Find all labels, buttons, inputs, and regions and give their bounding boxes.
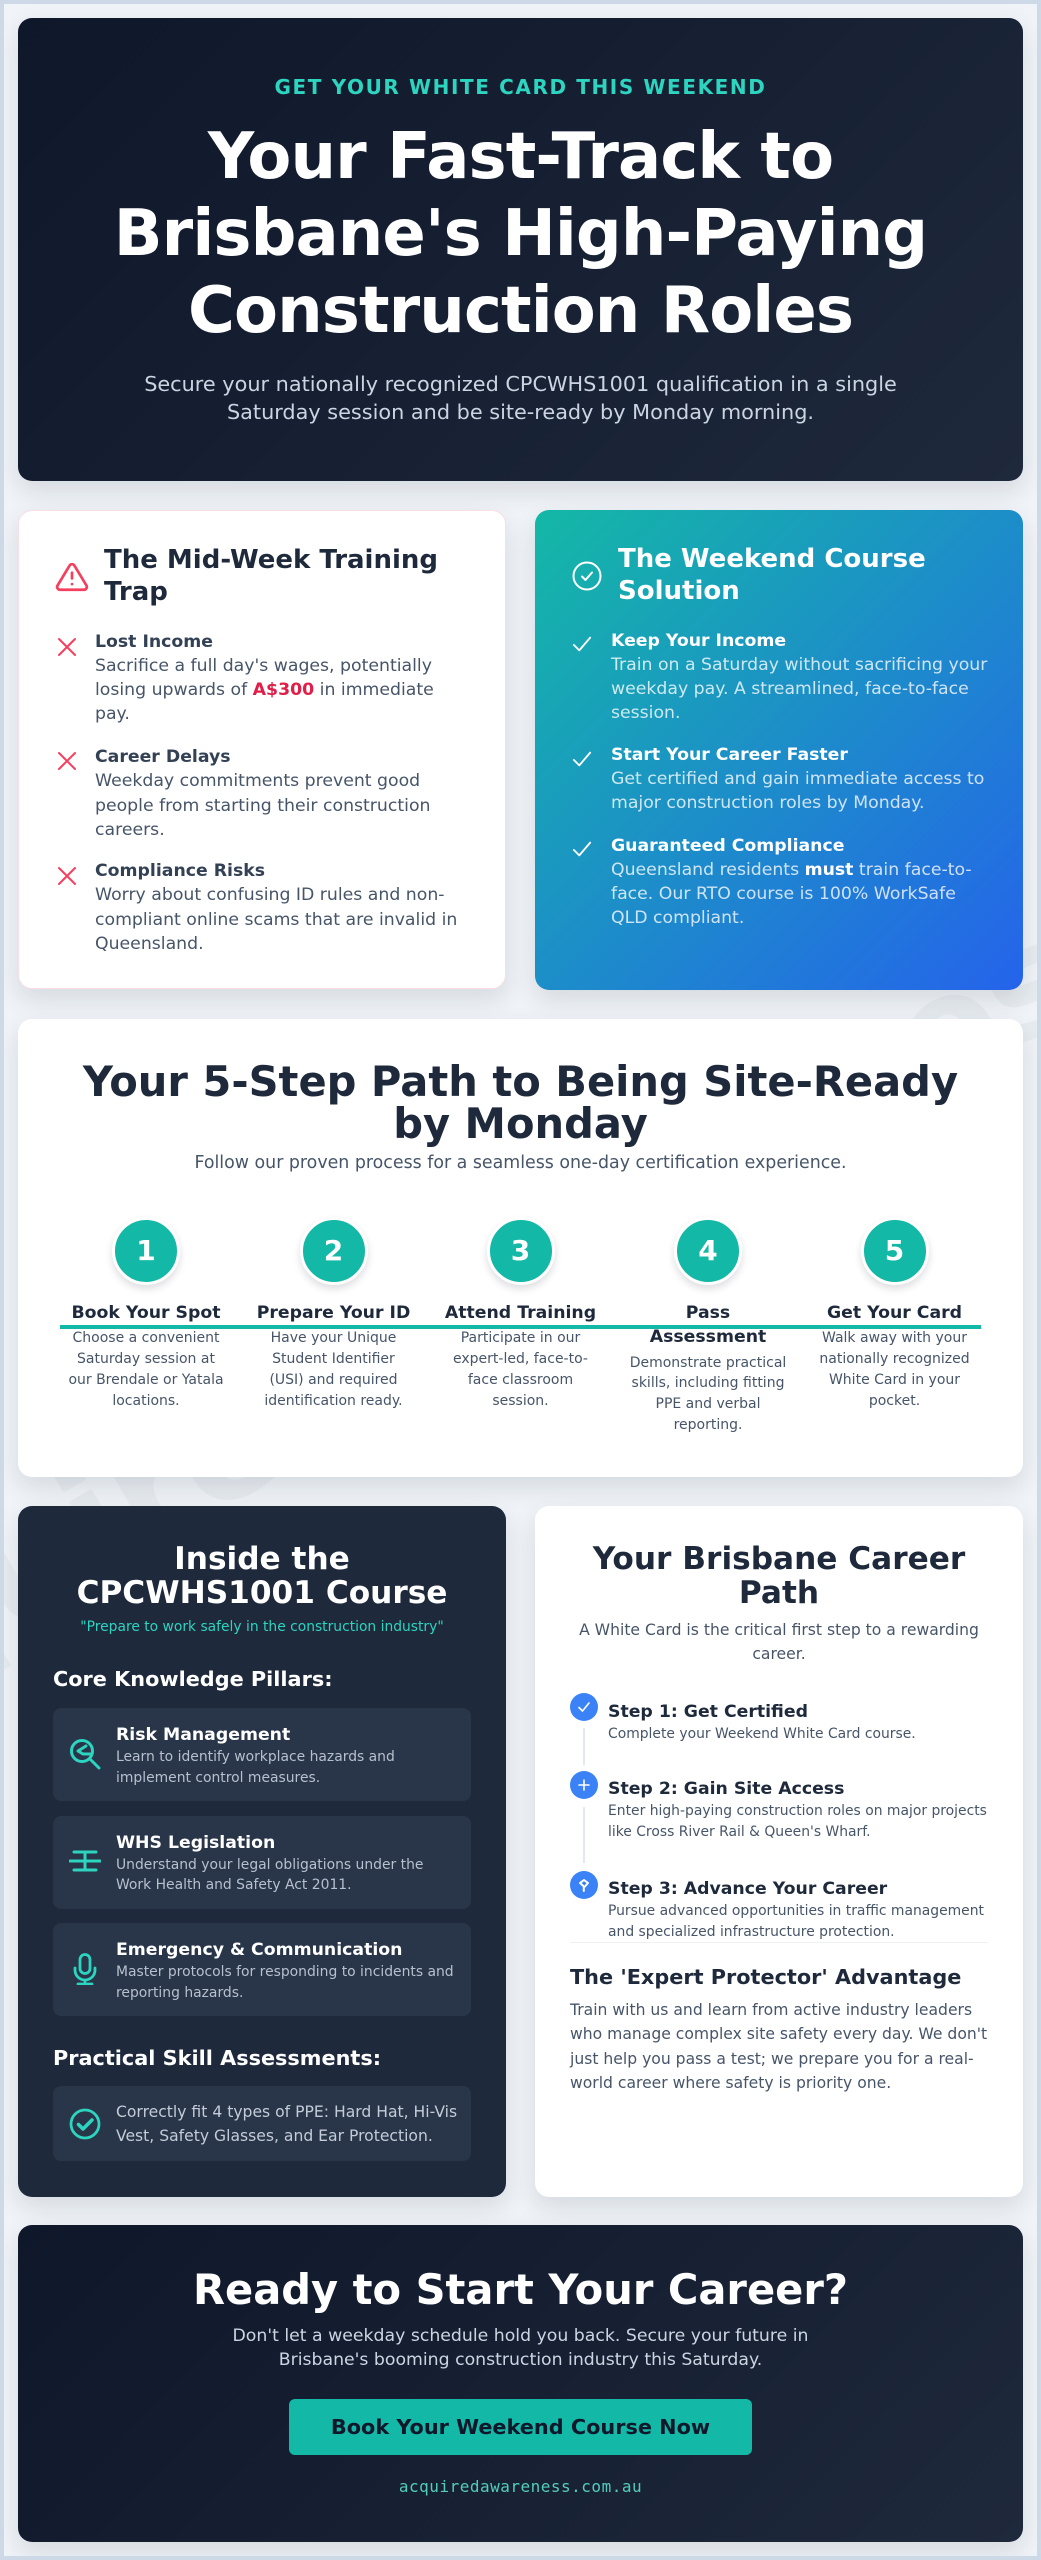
item: compliance risks	[95, 861, 457, 954]
step 2 text: Prepare Your ID	[257, 1303, 410, 1323]
pillar: whs legislation	[53, 1816, 471, 1908]
item: guaranteed compliance	[611, 836, 972, 928]
step 4 text: skills, including fitting	[632, 1375, 784, 1391]
step 4 text: reporting.	[674, 1417, 742, 1433]
advantage text: world career where safety is priority one.	[570, 2074, 891, 2092]
item: compliance risks: compliant online scams that are invalid in	[95, 910, 457, 930]
website: acquiredawareness.com.au	[399, 2477, 642, 2496]
heading: Path	[739, 1574, 819, 1610]
step 3 text: face classroom	[468, 1372, 573, 1388]
advantage heading: The 'Expert Protector' Advantage	[570, 1965, 961, 1989]
step 1 number	[112, 1217, 180, 1285]
step 1 text: Saturday session at	[77, 1351, 215, 1367]
subheading: A White Card is the critical first step to a rewarding	[579, 1621, 979, 1639]
icon: check	[572, 842, 592, 856]
text	[232, 2326, 808, 2370]
heading: The Weekend Course	[618, 544, 926, 574]
item: compliance risks: Compliance Risks	[95, 861, 265, 881]
title: Your Fast-Track to	[208, 120, 833, 194]
text: Don't let a weekday schedule hold you back. Secure your future in	[232, 2326, 808, 2346]
step 3 text	[445, 1303, 596, 1409]
step 2 text: Have your Unique	[271, 1330, 396, 1346]
heading	[618, 544, 926, 606]
advantage text: who manage complex site safety every day. We don't	[570, 2025, 987, 2043]
step 3 number: 3	[511, 1234, 530, 1267]
heading	[592, 1540, 966, 1610]
heading: Your Brisbane Career	[593, 1540, 965, 1576]
button: Book Your Weekend Course Now	[331, 2415, 710, 2439]
heading	[77, 1540, 447, 1610]
step 2 text: identification ready.	[264, 1393, 403, 1409]
item: keep your income: Train on a Saturday without sacrificing your	[611, 655, 987, 675]
step 1 text: Choose a convenient	[73, 1330, 219, 1346]
step 4 text: Demonstrate practical	[630, 1355, 786, 1371]
step 1 text: Complete your Weekend White Card course.	[608, 1726, 916, 1742]
step 5 number	[860, 1217, 928, 1285]
heading: CPCWHS1001 Course	[77, 1574, 447, 1610]
step 4 text	[630, 1303, 786, 1433]
item: start your career faster: major construction roles by Monday.	[611, 793, 925, 813]
item: lost income: Sacrifice a full day's wages, potentially	[95, 656, 432, 676]
description: Understand your legal obligations under the	[116, 1856, 423, 1872]
step 5 text: pocket.	[869, 1393, 920, 1409]
connector 1	[583, 1728, 585, 1765]
text: Brisbane's booming construction industry this Saturday.	[279, 2350, 762, 2370]
description	[116, 2102, 457, 2145]
step 2 text: like Cross River Rail & Queen's Wharf.	[608, 1824, 871, 1840]
step 2 text	[257, 1303, 410, 1409]
subtitle: Secure your nationally recognized CPCWHS1001 qualification in a single	[144, 372, 897, 396]
title: Brisbane's High-Paying	[114, 196, 927, 270]
icon: check	[572, 752, 592, 766]
panel: career path	[535, 1506, 1023, 2197]
step 3 text: Participate in our	[461, 1330, 580, 1346]
step 3 text: expert-led, face-to-	[453, 1351, 588, 1367]
icon: step 2 plus	[570, 1771, 598, 1799]
panel: mid-week training trap	[18, 510, 506, 989]
item: career delays: Career Delays	[95, 747, 231, 767]
advantage text: just help you pass a test; we prepare you for a real-	[570, 2050, 974, 2068]
description: Master protocols for responding to incidents and	[116, 1964, 454, 1980]
heading: by Monday	[393, 1099, 648, 1148]
item: lost income: Lost Income	[95, 632, 213, 652]
icon: cross	[58, 638, 76, 656]
panel: 5-step path	[18, 1019, 1023, 1477]
title	[114, 120, 927, 348]
description: Vest, Safety Glasses, and Ear Protection.	[116, 2127, 433, 2145]
heading	[104, 545, 438, 606]
subheading	[579, 1621, 979, 1663]
icon: scales	[69, 1850, 101, 1872]
item: compliance risks: Worry about confusing ID rules and non-	[95, 885, 445, 905]
item: start your career faster: Get certified and gain immediate access to	[611, 769, 984, 789]
advantage text	[570, 2001, 987, 2092]
step 2 text: Enter high-paying construction roles on major projects	[608, 1803, 987, 1819]
item: career delays: careers.	[95, 820, 165, 840]
subtitle: Saturday session and be site-ready by Monday morning.	[227, 400, 814, 424]
step 3 text: Attend Training	[445, 1303, 596, 1323]
title: Emergency & Communication	[116, 1940, 402, 1960]
step 1 text: Book Your Spot	[71, 1303, 221, 1323]
icon: cross	[58, 867, 76, 885]
step 1 text: Step 1: Get Certified	[608, 1702, 808, 1722]
pillar: risk management	[53, 1708, 471, 1801]
item: start your career faster	[611, 744, 984, 813]
panel: call to action	[18, 2225, 1023, 2542]
item: keep your income	[610, 630, 988, 723]
description	[116, 1749, 395, 1786]
step 3 text: and specialized infrastructure protection.	[608, 1924, 895, 1940]
divider	[570, 1942, 988, 1943]
step 5 text: Get Your Card	[827, 1303, 962, 1323]
icon: warning triangle	[56, 562, 88, 592]
step 2 text	[608, 1779, 987, 1840]
subheading: career.	[752, 1645, 806, 1663]
description: reporting hazards.	[116, 1985, 243, 2001]
step 5 number: 5	[885, 1234, 904, 1267]
step 1 text: locations.	[112, 1393, 180, 1409]
section heading: Practical Skill Assessments:	[53, 2046, 381, 2070]
step 5 text: White Card in your	[829, 1372, 960, 1388]
subheading: Follow our proven process for a seamless one-day certification experience.	[194, 1153, 847, 1173]
pillar: emergency and communication	[53, 1923, 471, 2016]
icon: step 1 check	[570, 1693, 598, 1721]
item: guaranteed compliance: Queensland residents must train face-to-	[611, 860, 972, 880]
icon: cross	[58, 752, 76, 770]
heading: Inside the	[174, 1540, 350, 1576]
step 5 text: nationally recognized	[819, 1351, 970, 1367]
heading: Solution	[618, 576, 740, 606]
step 2 text: (USI) and required	[269, 1372, 398, 1388]
description	[116, 1856, 423, 1893]
heading: The Mid-Week Training	[104, 545, 438, 575]
step 2 number	[300, 1217, 368, 1285]
step 1 text	[68, 1303, 224, 1409]
item: keep your income: session.	[611, 703, 680, 723]
heading: Trap	[104, 576, 168, 606]
step 4 text: Pass	[686, 1303, 730, 1323]
step 1 text	[608, 1702, 916, 1742]
item: guaranteed compliance: Guaranteed Compliance	[611, 836, 844, 856]
description: Learn to identify workplace hazards and	[116, 1749, 395, 1765]
advantage text: Train with us and learn from active industry leaders	[570, 2001, 972, 2019]
item: compliance risks: Queensland.	[95, 934, 204, 954]
heading: Your 5-Step Path to Being Site-Ready	[83, 1057, 958, 1106]
heading	[82, 1057, 958, 1148]
button	[289, 2399, 752, 2455]
item: lost income: losing upwards of A$300 in immediate	[95, 680, 434, 700]
step 2 text: Student Identifier	[272, 1351, 395, 1367]
item: career delays: Weekday commitments prevent good	[95, 771, 420, 791]
connector 2	[583, 1807, 585, 1863]
step 4 number	[674, 1217, 742, 1285]
icon: microphone	[74, 1953, 96, 1985]
step 4 number: 4	[698, 1234, 718, 1267]
icon: step 3 pin	[570, 1871, 598, 1899]
panel: inside the course	[18, 1506, 506, 2197]
item: keep your income: weekday pay. A streamlined, face-to-face	[611, 679, 969, 699]
step 3 text: Pursue advanced opportunities in traffic management	[608, 1903, 984, 1919]
step 2 number: 2	[324, 1234, 343, 1267]
icon: circle check	[572, 562, 602, 590]
item: career delays: people from starting their construction	[95, 796, 430, 816]
step 4 text: PPE and verbal	[656, 1396, 760, 1412]
panel: hero	[18, 18, 1023, 481]
item: guaranteed compliance: QLD compliant.	[611, 908, 744, 928]
icon: check	[572, 636, 592, 652]
item: keep your income: Keep Your Income	[611, 630, 786, 650]
step 3 number	[486, 1217, 554, 1285]
description	[116, 1964, 454, 2001]
ppe assessment card	[53, 2086, 471, 2161]
item: lost income: pay.	[95, 704, 130, 724]
step 3 text: Step 3: Advance Your Career	[608, 1879, 887, 1899]
icon: thick check circle	[70, 2108, 100, 2140]
title: Risk Management	[116, 1725, 290, 1745]
step 2 text: Step 2: Gain Site Access	[608, 1779, 844, 1799]
item: lost income	[95, 632, 434, 724]
step 3 text: session.	[492, 1393, 549, 1409]
eyebrow: GET YOUR WHITE CARD THIS WEEKEND	[275, 75, 766, 99]
quote: "Prepare to work safely in the construction industry"	[80, 1619, 444, 1635]
item: career delays	[95, 747, 430, 840]
section heading: Core Knowledge Pillars:	[53, 1667, 333, 1691]
description: Work Health and Safety Act 2011.	[116, 1877, 352, 1893]
title: Construction Roles	[188, 274, 853, 348]
timeline line	[60, 1325, 981, 1329]
item: guaranteed compliance: face. Our RTO course is 100% WorkSafe	[611, 884, 956, 904]
step 5 text	[819, 1303, 970, 1409]
step 1 text: our Brendale or Yatala	[68, 1372, 224, 1388]
item: start your career faster: Start Your Career Faster	[611, 744, 848, 764]
step 4 text: Assessment	[650, 1327, 766, 1347]
icon: search	[70, 1739, 100, 1770]
title: WHS Legislation	[116, 1832, 275, 1852]
heading: Ready to Start Your Career?	[193, 2264, 848, 2314]
step 5 text: Walk away with your	[822, 1330, 967, 1346]
step 1 number: 1	[136, 1234, 156, 1267]
description: implement control measures.	[116, 1770, 320, 1786]
step 3 text	[608, 1879, 984, 1940]
description: Correctly fit 4 types of PPE: Hard Hat, Hi-Vis	[116, 2102, 457, 2120]
panel: weekend course solution	[535, 510, 1023, 990]
subtitle	[144, 372, 897, 424]
